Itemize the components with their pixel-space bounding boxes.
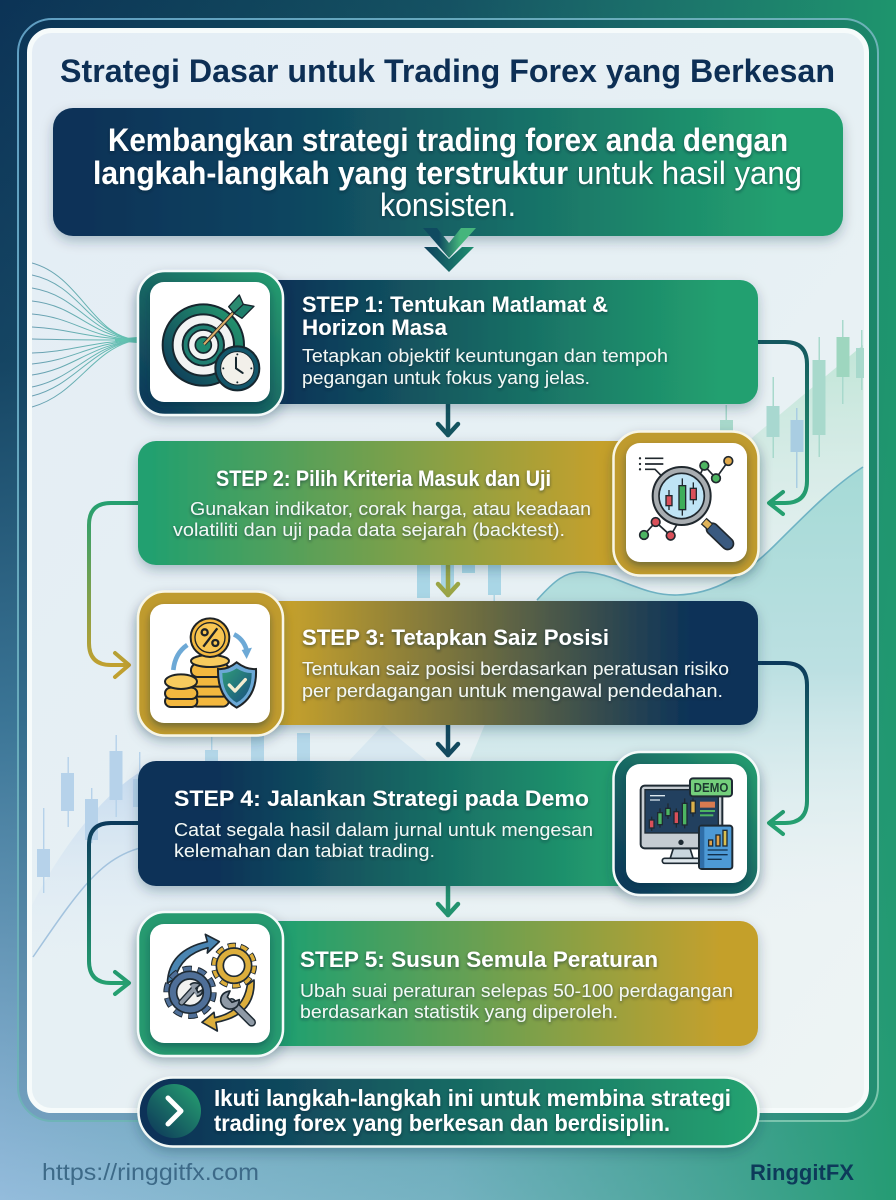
step 4 text <box>174 786 593 861</box>
step 3 icon tile <box>138 592 283 736</box>
step 4 text: kelemahan dan tabiat trading. <box>174 840 435 861</box>
step 1 text: STEP 1: Tentukan Matlamat & <box>302 292 608 317</box>
step 1 panel <box>138 271 758 415</box>
website url: https://ringgitfx.com <box>42 1159 259 1185</box>
icon: coins and shield <box>165 618 256 708</box>
step 1 text <box>302 292 668 388</box>
intro text: untuk hasil yang <box>577 155 802 191</box>
intro text <box>93 122 802 223</box>
closing text <box>214 1085 731 1136</box>
step 1 icon tile <box>138 271 283 415</box>
icon: chevron in circle <box>147 1084 201 1138</box>
step 2 text: STEP 2: Pilih Kriteria Masuk dan Uji <box>216 466 551 491</box>
step 5 text: STEP 5: Susun Semula Peraturan <box>300 947 658 972</box>
decorative chart background <box>32 263 864 960</box>
arrow: step 2 to step 3 <box>438 563 458 595</box>
step 1 bar <box>138 280 758 404</box>
icon: demo monitor with report <box>641 778 732 869</box>
step 1 text: Horizon Masa <box>302 315 448 340</box>
step 2 text: volatiliti dan uji pada data sejarah (backtest). <box>173 519 565 540</box>
intro banner <box>53 108 843 236</box>
icon: gears, wrench and arrows <box>167 934 254 1031</box>
icon: demo monitor with report: DEMO <box>694 781 728 795</box>
step 2 bar <box>138 441 758 565</box>
step 4 icon tile <box>614 752 758 895</box>
step 3 text <box>302 625 729 701</box>
step 5 text <box>300 947 733 1022</box>
step 5 text: Ubah suai peraturan selepas 50-100 perdagangan <box>300 980 733 1001</box>
intro text: langkah-langkah yang terstruktur <box>93 155 568 191</box>
arrow: step 2 to step 3 side <box>89 503 140 677</box>
step 2 icon tile <box>614 432 758 576</box>
step 3 bar <box>138 601 758 725</box>
connectors <box>89 342 807 994</box>
arrow: step 3 to step 4 side <box>756 663 807 834</box>
closing text: trading forex yang berkesan dan berdisiplin. <box>214 1110 670 1136</box>
step 5 icon tile <box>138 912 283 1056</box>
step 4 text: Catat segala hasil dalam jurnal untuk mengesan <box>174 819 593 840</box>
closing text: Ikuti langkah-langkah ini untuk membina strategi <box>214 1085 731 1111</box>
fan of lines <box>32 263 136 407</box>
step 4 text: STEP 4: Jalankan Strategi pada Demo <box>174 786 589 811</box>
arrow: step 3 to step 4 <box>438 723 458 755</box>
step 2 text: Gunakan indikator, corak harga, atau keadaan <box>190 498 591 519</box>
arrow: step 4 to step 5 side <box>89 823 140 994</box>
title: Strategi Dasar untuk Trading Forex yang Berkesan <box>60 53 835 89</box>
icon: target with arrow and clock <box>163 295 259 390</box>
icon: double chevron <box>423 228 476 272</box>
closing callout pill <box>138 1078 758 1146</box>
arrow: step 4 to step 5 <box>438 884 458 915</box>
icon: magnifier with candlesticks <box>639 457 733 544</box>
intro text: konsisten. <box>380 187 516 223</box>
step 2 text <box>173 466 591 540</box>
intro text: Kembangkan strategi trading forex anda dengan <box>108 122 788 158</box>
step 5 panel <box>138 912 758 1056</box>
step 1 text: pegangan untuk fokus yang jelas. <box>302 367 590 388</box>
brand name: RinggitFX <box>750 1160 854 1185</box>
step 3 panel <box>138 592 758 736</box>
step 5 text: berdasarkan statistik yang diperoleh. <box>300 1001 618 1022</box>
step 5 bar <box>138 921 758 1046</box>
arrow: step 1 to step 2 side <box>756 342 807 514</box>
step 4 bar <box>138 761 758 886</box>
step 4 panel <box>138 752 758 895</box>
step 3 text: Tentukan saiz posisi berdasarkan peratusan risiko <box>302 658 729 679</box>
arrow: step 1 to step 2 <box>438 402 458 435</box>
step 2 panel <box>138 432 758 576</box>
step 3 text: per perdagangan untuk mengawal pendedahan. <box>302 680 723 701</box>
step 1 text: Tetapkan objektif keuntungan dan tempoh <box>302 345 668 366</box>
step 3 text: STEP 3: Tetapkan Saiz Posisi <box>302 625 609 650</box>
